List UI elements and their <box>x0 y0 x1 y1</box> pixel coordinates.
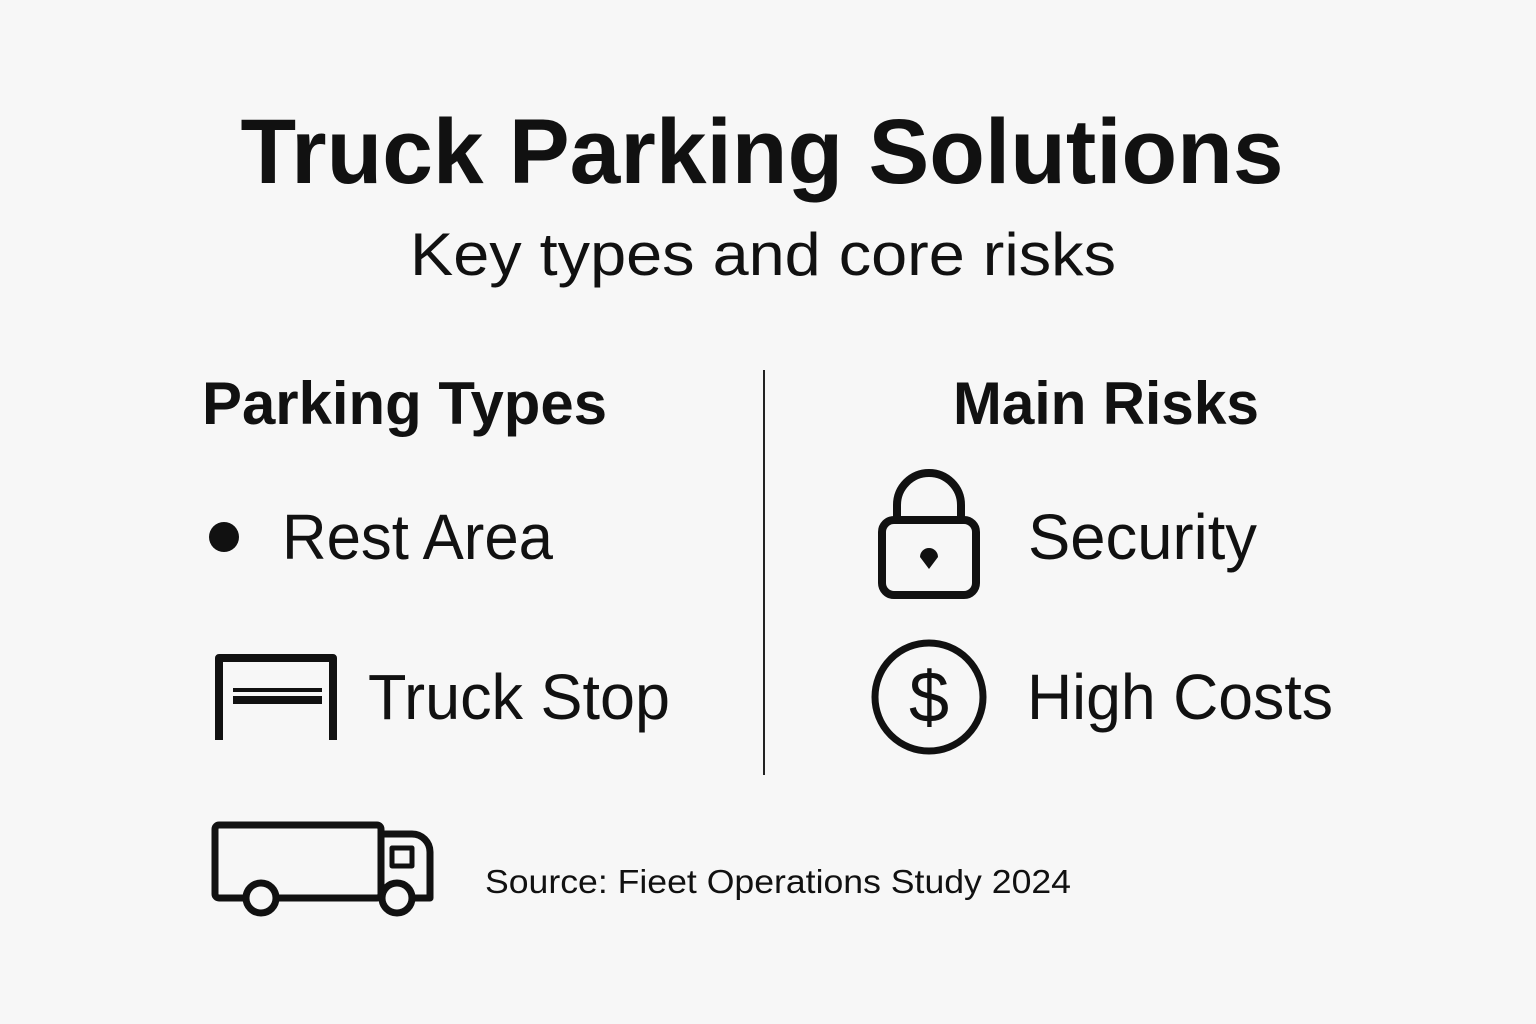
source: Source: Fieet Operations Study 2024 <box>485 863 1071 900</box>
divider <box>763 370 765 775</box>
icon: truck <box>215 825 430 913</box>
icon: dollar <box>875 643 983 751</box>
text: high costs: High Costs <box>1027 661 1333 733</box>
text: security: Security <box>1028 501 1257 573</box>
icon: bullet <box>209 522 239 552</box>
heading: main risks: Main Risks <box>953 370 1259 437</box>
subtitle: Key types and core risks <box>410 221 1116 288</box>
text: rest area: Rest Area <box>282 501 553 573</box>
panel: main risks <box>875 370 1333 751</box>
heading: parking types: Parking Types <box>202 370 607 437</box>
icon: dollar: $ <box>909 658 949 738</box>
panel: parking types <box>202 370 670 740</box>
icon: lock <box>882 473 976 595</box>
title: Truck Parking Solutions <box>240 101 1284 203</box>
text: truck stop: Truck Stop <box>368 661 670 733</box>
icon: truck stop <box>219 658 333 740</box>
